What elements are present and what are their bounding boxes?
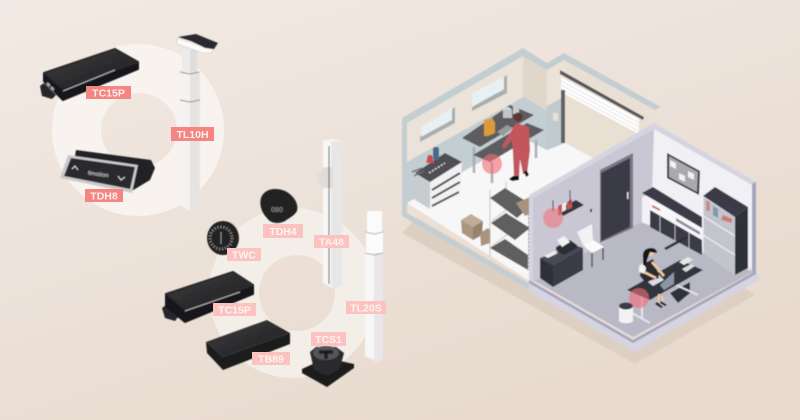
marker: office wall [543, 208, 563, 228]
product: TDH8 handset: timotion [87, 171, 109, 179]
office: floor [533, 222, 753, 337]
label: TL20S: TL20S [350, 302, 382, 314]
label: TDH8 [85, 189, 123, 202]
office: right wall [651, 129, 752, 269]
office: noticeboard [667, 153, 700, 195]
label: TC15P [86, 86, 131, 100]
product: TDH4 round handset: 080 [271, 207, 283, 214]
product: TL20S column [365, 211, 383, 363]
product: TDH8 handset [60, 150, 155, 193]
product: TDH4 round handset [260, 189, 297, 223]
garage: cardboard boxes [461, 214, 490, 246]
product: TB89 battery [206, 320, 290, 370]
garage: wall switch box [553, 113, 558, 121]
label: TA48 [314, 235, 349, 248]
label: TWC: TWC [232, 250, 256, 262]
label: TB89 [252, 352, 290, 366]
garage: workbench [462, 104, 544, 183]
product: TA48 column [318, 139, 342, 289]
product: TC15P control box (upper) [40, 49, 138, 100]
isometric room scene [402, 48, 759, 364]
ring: lower product group [209, 208, 377, 378]
floor shadow [402, 218, 755, 364]
office: white chair [577, 224, 604, 267]
label: TL10H [171, 127, 214, 141]
garage: roller door [560, 70, 644, 143]
garage: worker in red overalls [502, 112, 530, 181]
label: TCS1 [311, 332, 346, 346]
office: printer cabinet [540, 236, 583, 287]
label: TCS1: TCS1 [315, 334, 342, 346]
label: TL10H: TL10H [176, 129, 209, 141]
garage: walls and floor [402, 48, 661, 295]
garage: windows [420, 75, 507, 142]
garage: storage rack [490, 182, 533, 270]
label: TWC [227, 248, 261, 262]
office: seated woman [639, 248, 667, 308]
office: wall tops and outer edge [529, 123, 759, 352]
ring: upper product group [52, 44, 224, 216]
garage: tool cabinet [412, 147, 462, 209]
label: TC15P lower: TC15P [218, 304, 251, 316]
office: bookcase [703, 187, 748, 275]
office: door [600, 153, 633, 243]
label: TC15P lower [213, 303, 256, 316]
product: TCS1 column base [302, 346, 354, 387]
label: TDH4 [263, 224, 303, 238]
marker: workbench [482, 154, 502, 174]
label: TB89: TB89 [258, 354, 284, 366]
label: TA48: TA48 [319, 236, 344, 248]
marker: office desk [629, 288, 649, 308]
office: left wall [533, 129, 654, 282]
label: TDH4: TDH4 [269, 226, 297, 238]
office: desk [627, 236, 703, 323]
product: TWC wireless controller [207, 221, 239, 255]
office: wall shelf with books [553, 190, 592, 216]
product: TC15P control box (lower) [162, 272, 253, 322]
product: TL10H lifting column [177, 34, 218, 211]
office: wall cabinet [642, 187, 702, 255]
label: TDH8: TDH8 [90, 190, 118, 202]
office: waste bin [619, 302, 633, 323]
label: TC15P: TC15P [92, 88, 125, 100]
